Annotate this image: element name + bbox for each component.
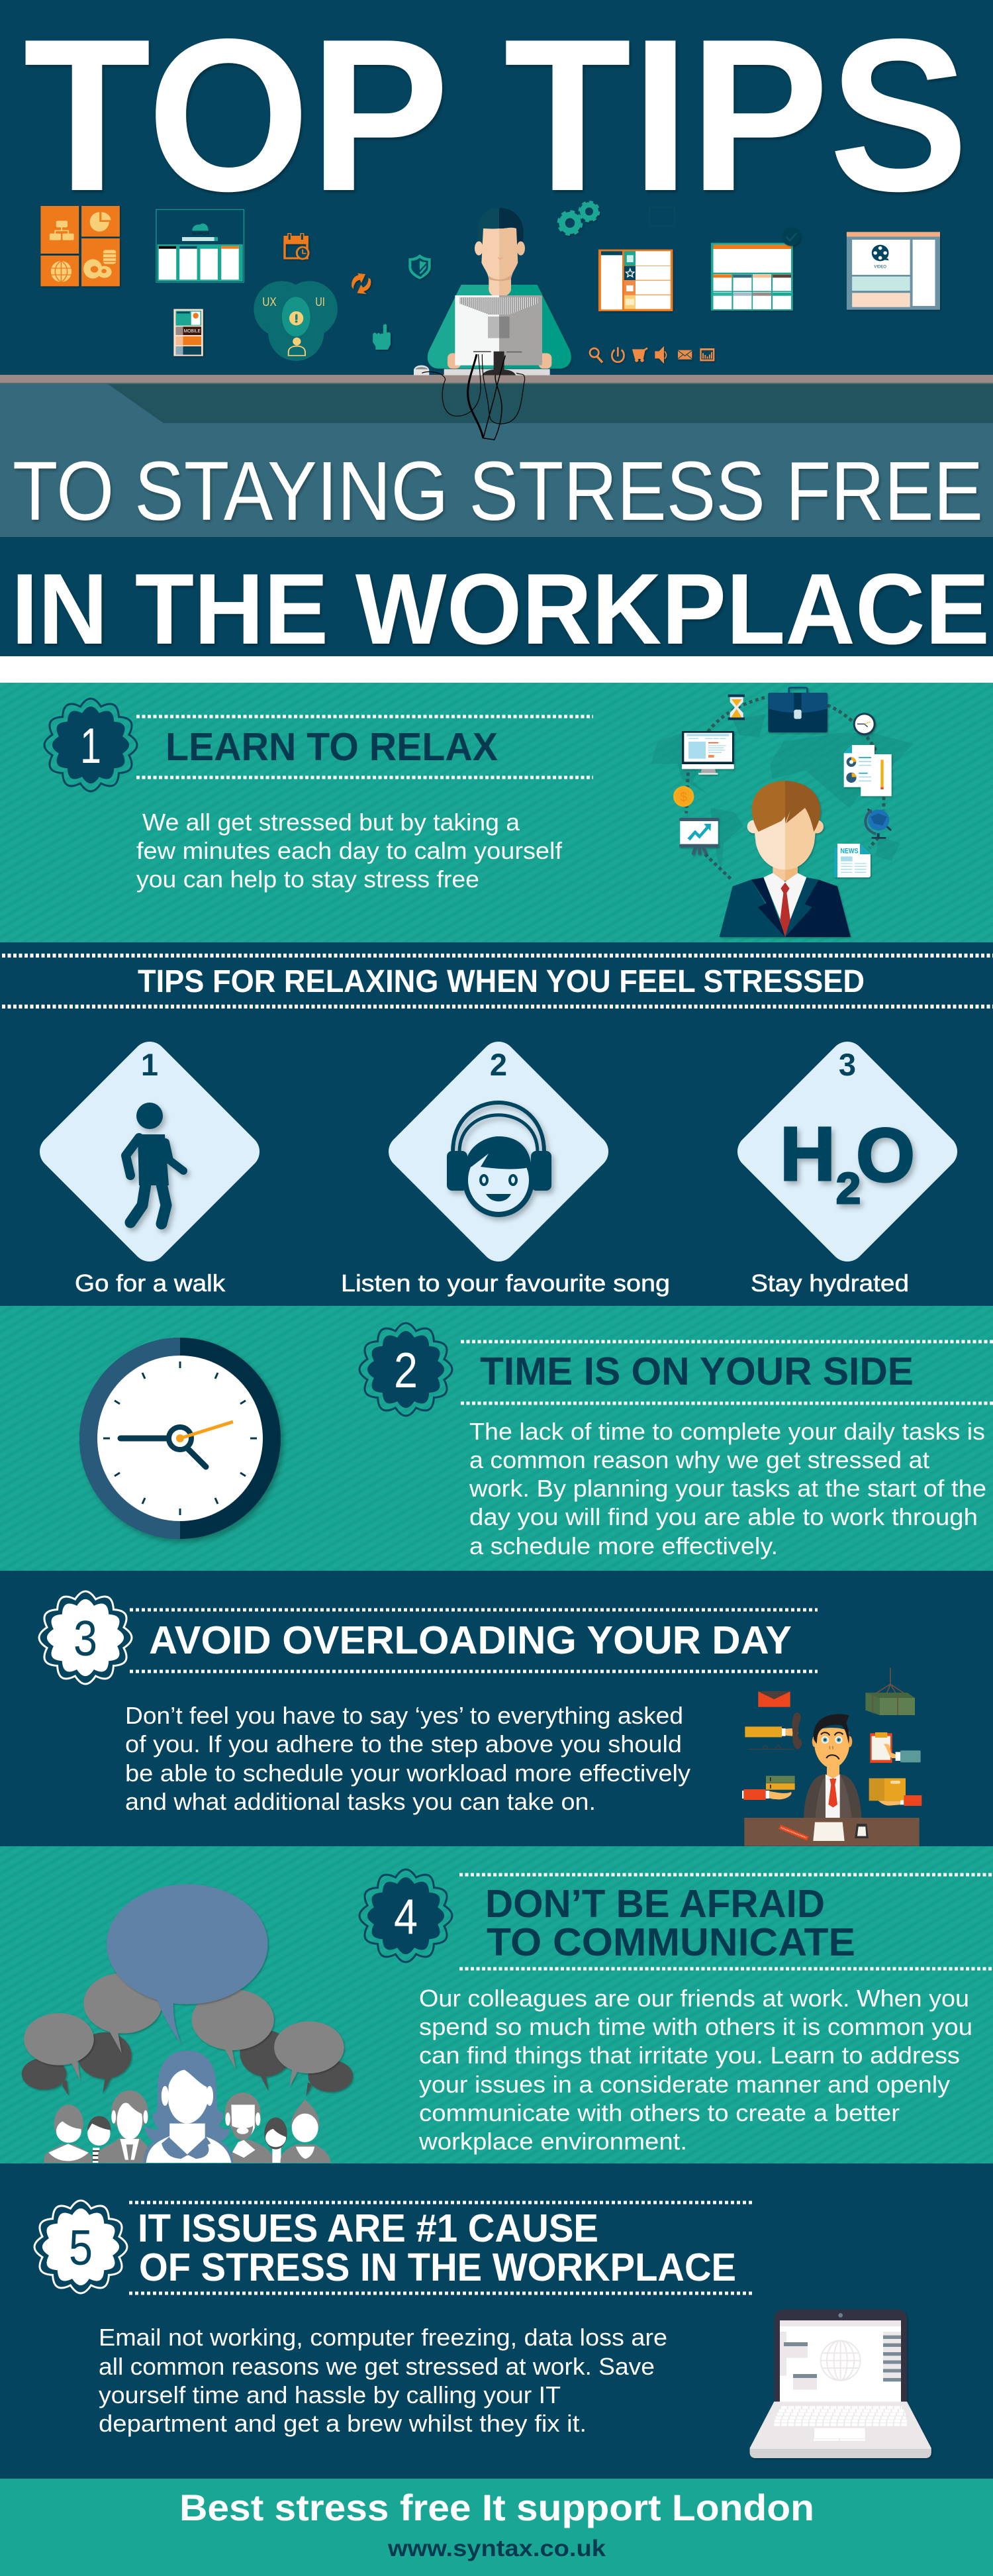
envelope (758, 1691, 790, 1707)
panel: tips for relaxing (0, 942, 993, 1306)
text block: tip 1: We all get stressed but by taking a (142, 809, 520, 836)
worried worker (804, 1714, 861, 1818)
icon: headphones face (447, 1103, 551, 1214)
text block: tip 4: your issues in a considerate manner and openly (419, 2071, 950, 2098)
panel: tip 2 time is on your side (0, 1306, 993, 1571)
text block: tip 4: workplace environment. (418, 2128, 687, 2155)
icon: pointing hand (373, 324, 391, 350)
icon: orange tile mosaic (40, 206, 120, 286)
hand with clipboard (870, 1732, 921, 1763)
badge: number 3: 3 (73, 1610, 97, 1666)
heading: time is on your side: TIME IS ON YOUR SIDE (480, 1350, 914, 1393)
text block: tip 3 (125, 1702, 690, 1815)
dotted arc (686, 697, 884, 879)
text block: tip 1 (136, 809, 563, 893)
man head (475, 208, 525, 297)
illustration: speech bubbles and colleagues (22, 1884, 353, 2163)
panel: tip 3 avoid overloading (0, 1571, 993, 1846)
documents (844, 745, 892, 796)
layout panel: video (847, 232, 940, 310)
icon: chart window (700, 348, 714, 361)
dark speech bubbles (22, 2030, 353, 2097)
icon: faint chart (649, 207, 675, 226)
text block: tip 1: you can help to stay stress free (136, 866, 479, 893)
icon: h2o: O (856, 1113, 915, 1198)
text block: tip 2: work. By planning your tasks at the start of the (469, 1475, 986, 1502)
icon: laptop (750, 2309, 931, 2458)
text block: tip 5: Email not working, computer freezing, data loss are (99, 2324, 667, 2351)
illustration: overloaded worker (742, 1667, 922, 1846)
heading: don't be afraid to communicate (485, 1882, 855, 1964)
text block: tip 3: of you. If you adhere to the step above you should (125, 1730, 682, 1758)
illustration: right header web layouts (598, 227, 940, 311)
newspaper (834, 844, 871, 877)
text block: tip 3: and what additional tasks you can take on. (125, 1788, 596, 1815)
computer monitor (682, 731, 734, 775)
layout panel: video: VIDEO (874, 265, 886, 270)
text block: tip 5 (99, 2324, 667, 2437)
panel: header background (0, 0, 993, 683)
coin (673, 786, 694, 807)
chart: ux ui venn diagram: UX (262, 295, 277, 309)
tip card: stay hydrated (751, 1047, 940, 1297)
icon: search panel: SEARCH (192, 231, 209, 236)
world map (651, 714, 914, 869)
illustration: man at computer with icons (408, 202, 714, 440)
icon: h2o: 2 (836, 1164, 861, 1213)
icon: speaker (656, 348, 666, 362)
footer url: www.syntax.co.uk (387, 2536, 606, 2561)
text block: tip 5: yourself time and hassle by calling your IT (99, 2381, 561, 2408)
coin: $ (680, 791, 687, 805)
diamond 2 (406, 1059, 591, 1244)
colleague far right (280, 2099, 330, 2163)
panel: tip 5 it issues (0, 2163, 993, 2479)
grey speech bubbles (24, 1973, 344, 2087)
businessman (720, 781, 851, 937)
hourglass (728, 695, 745, 720)
computer mouse (414, 366, 429, 375)
newspaper: NEWS (840, 848, 859, 856)
heading: it issues are number 1 cause: OF STRESS IN THE WORKPLACE (139, 2246, 736, 2289)
number 3: 3 (839, 1047, 856, 1082)
icons: small orange toolbar (590, 347, 714, 362)
icon: film reel (872, 245, 889, 261)
briefcase (768, 687, 828, 732)
icon: gears (559, 202, 598, 234)
badge: number 1 (44, 699, 137, 791)
tip card: go for a walk (57, 1047, 242, 1297)
text block: tip 4: communicate with others to create a better (419, 2099, 900, 2126)
heading: don't be afraid to communicate: DON’T BE AFRAID (485, 1882, 825, 1926)
icon: envelope (678, 350, 692, 360)
text block: tip 2: day you will find you are able to work through (469, 1503, 978, 1530)
heading: it issues are number 1 cause (138, 2206, 736, 2289)
icon: shield (408, 254, 431, 279)
hand with box (869, 1778, 922, 1806)
clock small (853, 713, 876, 735)
diamond 1 (57, 1059, 242, 1244)
text block: tip 3: Don’t feel you have to say ‘yes’ to everything asked (125, 1702, 683, 1729)
label: Listen to your favourite song (341, 1269, 670, 1297)
label: Go for a walk (75, 1269, 226, 1297)
figure: man (414, 208, 571, 440)
hand with phone (745, 1712, 802, 1750)
text block: tip 4: Our colleagues are our friends at work. When you (419, 1985, 969, 2012)
icon: h2o: H (780, 1112, 835, 1197)
desk cables (422, 354, 525, 440)
text block: tip 2 (469, 1418, 986, 1560)
text block: tip 4 (418, 1985, 972, 2155)
panel: tip 1 learn to relax (0, 683, 993, 942)
badge: number 2: 2 (394, 1342, 418, 1398)
diamond 3 (755, 1059, 940, 1244)
colleague man left (98, 2091, 152, 2163)
footer heading: Best stress free It support London (179, 2487, 814, 2528)
icon: mobile layout (173, 309, 203, 356)
hand with books (742, 1776, 795, 1800)
child left (87, 2116, 111, 2163)
layout panel: orange (598, 250, 673, 311)
text block: tip 1: few minutes each day to calm yourself (136, 837, 563, 864)
icon: calendar clock (283, 234, 308, 259)
number 1: 1 (141, 1047, 158, 1082)
heading: don't be afraid to communicate: TO COMMUNICATE (487, 1920, 855, 1964)
child right (264, 2118, 287, 2163)
badge: number 5: 5 (69, 2220, 93, 2275)
panel: footer (0, 2479, 993, 2576)
icon: search panel (156, 209, 244, 282)
desk (744, 1818, 920, 1846)
chart: ux ui venn diagram (254, 281, 338, 361)
badge: number 2 (359, 1323, 452, 1416)
label: Stay hydrated (751, 1269, 909, 1297)
colleague man right (225, 2093, 276, 2163)
text block: tip 4: can find things that irritate you. Learn to address (419, 2042, 960, 2069)
icon: check badge (782, 227, 800, 246)
presentation board (679, 818, 719, 855)
globe (865, 809, 891, 839)
hanging parcel (865, 1667, 915, 1715)
icon: magnifier (590, 348, 602, 362)
panel: tip 4 communicate (0, 1846, 993, 2163)
badge: number 4: 4 (394, 1889, 418, 1944)
text block: tip 2: The lack of time to complete your daily tasks is (469, 1418, 985, 1445)
text block: tip 5: department and get a brew whilst they fix it. (99, 2410, 587, 2437)
badge: number 4 (359, 1869, 452, 1962)
layout panel: teal grid (711, 243, 793, 311)
heading: avoid overloading: AVOID OVERLOADING YOUR DAY (149, 1618, 792, 1662)
badge: number 1: 1 (80, 718, 101, 773)
icon: refresh arrows (352, 273, 371, 294)
tip card: favourite song (341, 1047, 670, 1297)
man torso (428, 285, 571, 369)
icon: mobile layout: MOBILE (184, 328, 201, 334)
illustration: left header icons (40, 206, 391, 361)
computer monitor back (444, 295, 551, 375)
text block: tip 2: a schedule more effectively. (469, 1532, 778, 1560)
icon: wall clock (79, 1338, 281, 1539)
icon: walking person (126, 1103, 183, 1224)
illustration: businessman with world map (651, 687, 914, 937)
text block: tip 2: a common reason why we get stressed at (469, 1446, 929, 1473)
heading: it issues are number 1 cause: IT ISSUES ARE #1 CAUSE (138, 2206, 598, 2250)
central woman (144, 2051, 234, 2163)
text block: tip 5: all common reasons we get stressed at work. Save (99, 2353, 655, 2380)
chart: ux ui venn diagram: UI (315, 295, 325, 309)
heading: learn to relax: LEARN TO RELAX (166, 725, 498, 769)
heading: tips for relaxing: TIPS FOR RELAXING WHEN YOU FEEL STRESSED (138, 964, 865, 999)
icon: cart (634, 348, 647, 361)
text block: tip 3: be able to schedule your workload more effectively (125, 1759, 690, 1787)
colleague far left (44, 2105, 92, 2163)
badge: number 3 (39, 1591, 132, 1684)
icon: h2o (780, 1112, 915, 1213)
large blue speech bubble (107, 1884, 267, 2044)
badge: number 5 (34, 2201, 127, 2293)
text block: tip 4: spend so much time with others it is common you (419, 2013, 972, 2040)
icon: power (612, 347, 624, 362)
number 2: 2 (490, 1047, 507, 1082)
